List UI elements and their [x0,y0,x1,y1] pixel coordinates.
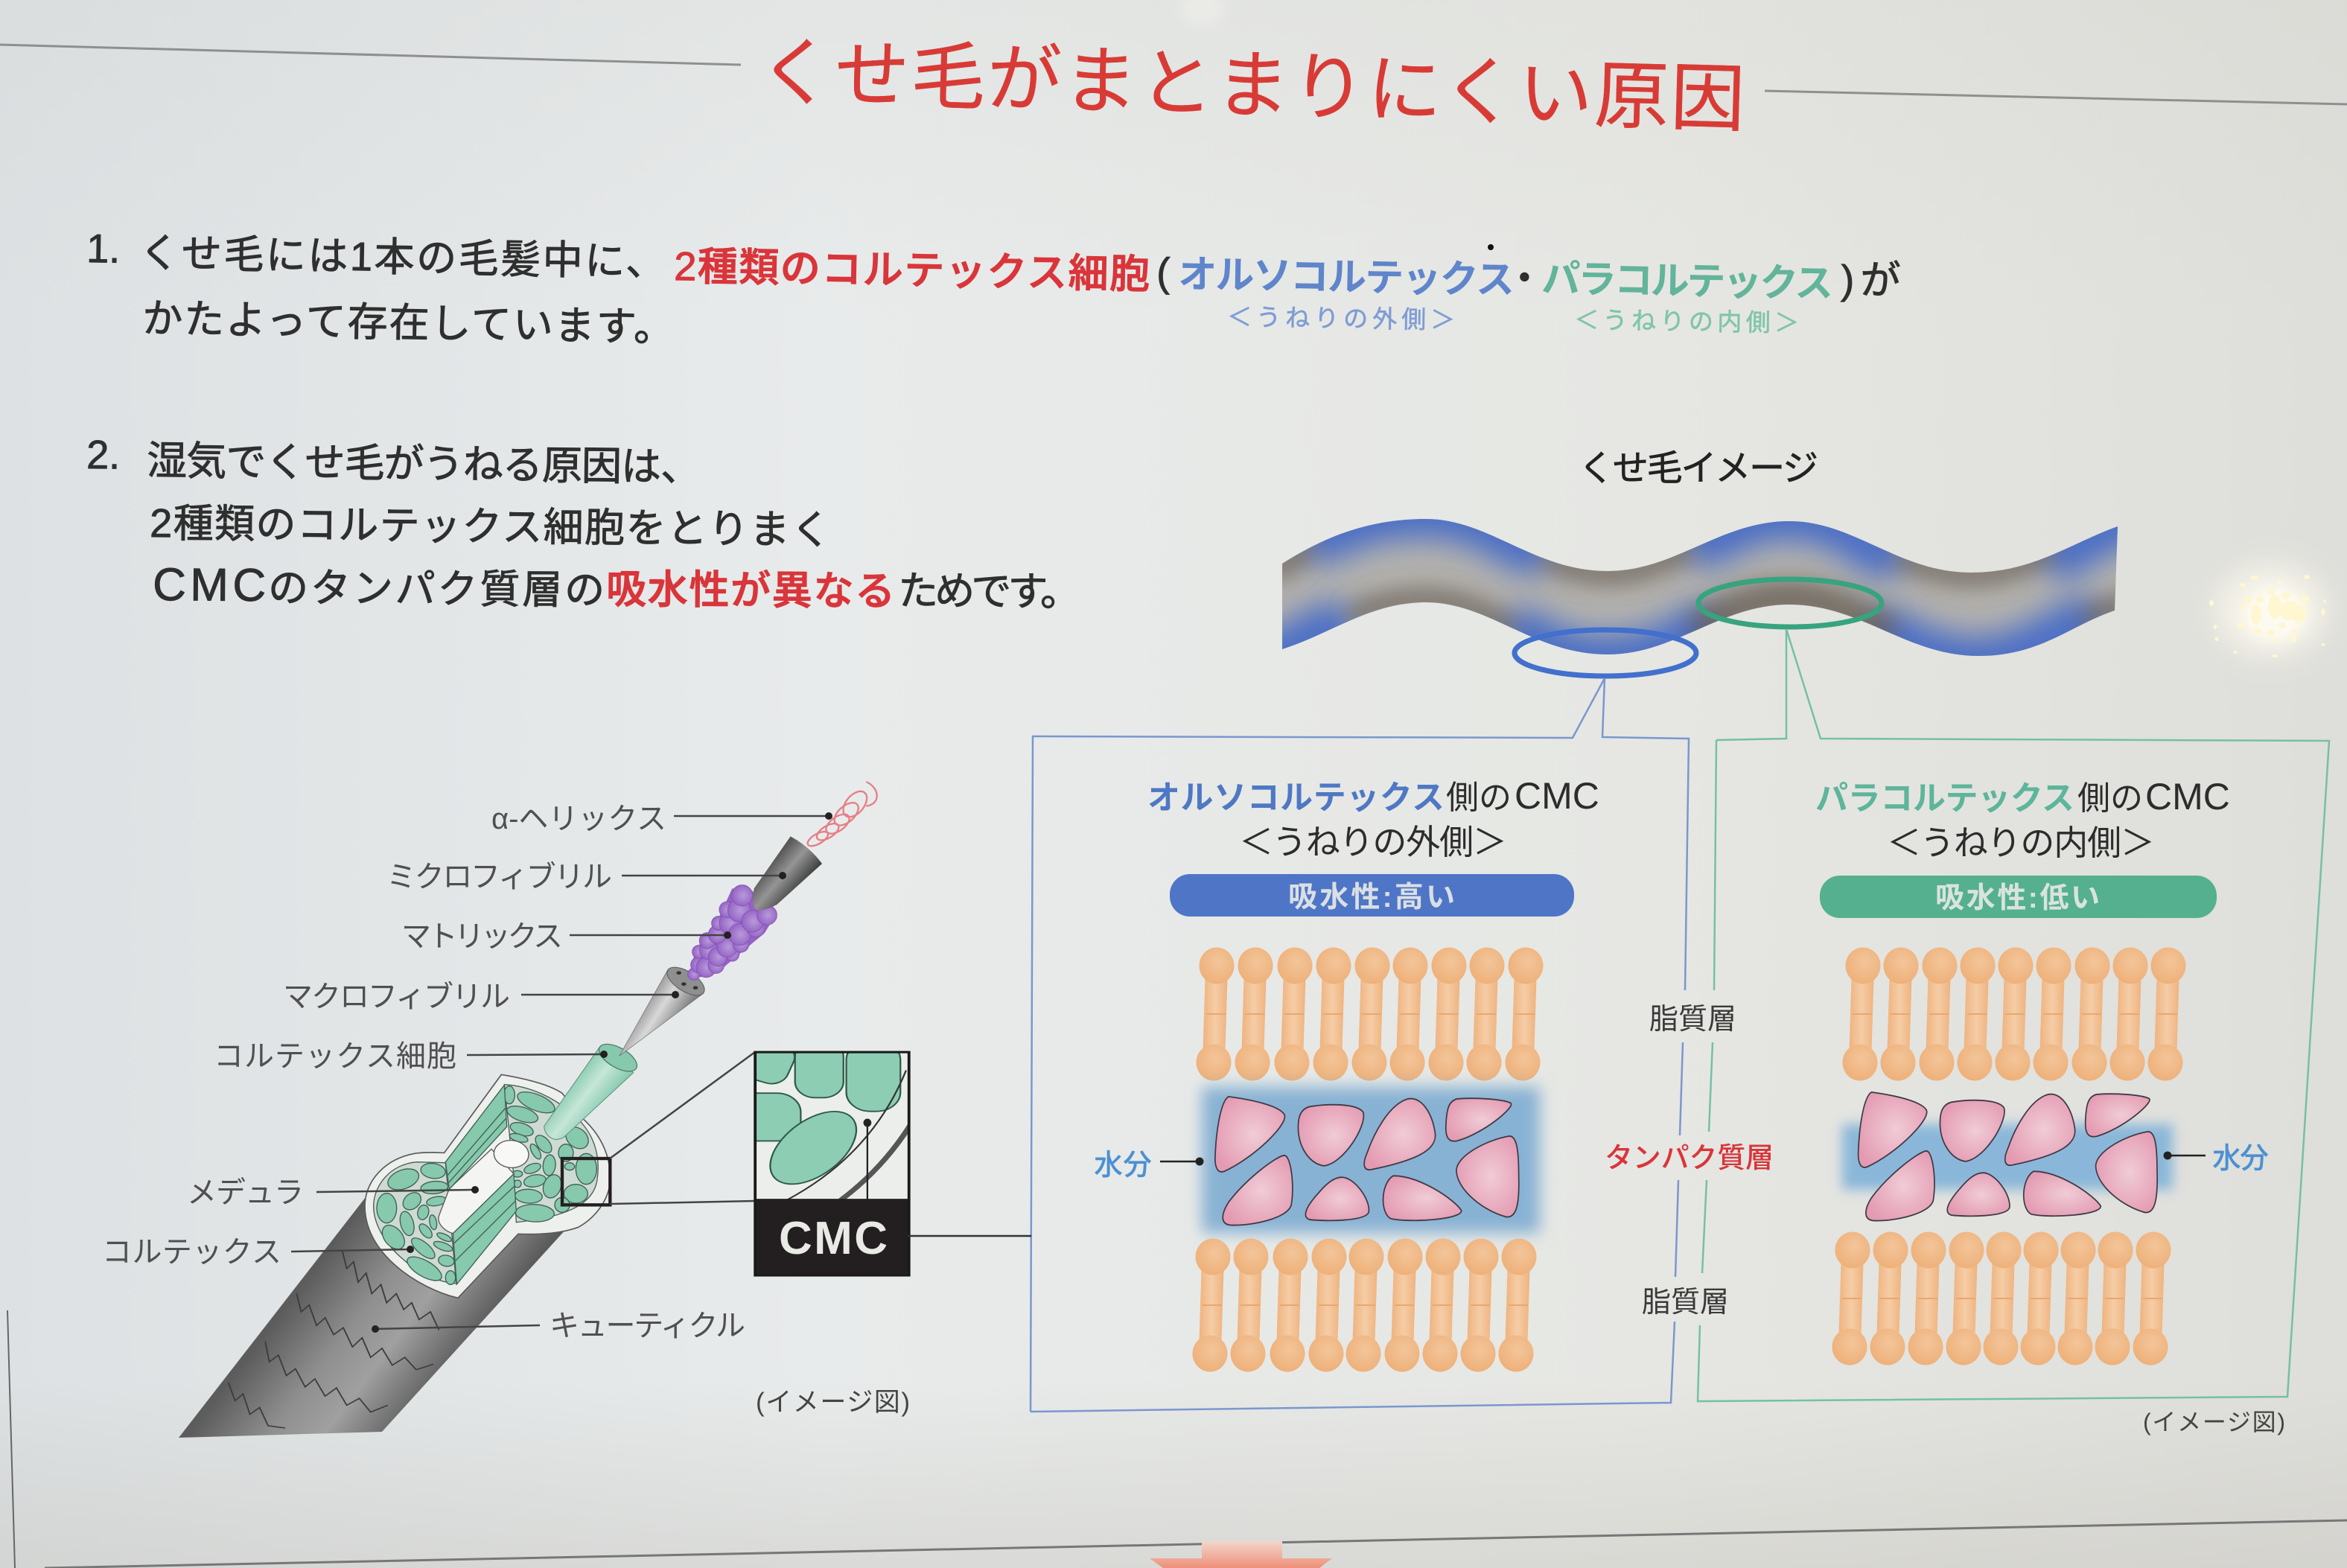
cross section [365,1039,641,1298]
labels: hair structure: ミクロフィブリル [386,861,612,893]
glare right [2209,564,2327,657]
subheading: outer side of wave: ＜うねりの外側＞ [1239,823,1507,861]
heading: ortho cortex [1147,775,1599,817]
labels: hair structure: マトリックス [401,920,563,953]
labels: hair structure: メデュラ [187,1176,304,1209]
heading: para cortex [1815,776,2230,818]
macrofibril cone [620,962,709,1056]
label: water: 水分 [1094,1150,1152,1182]
text block: point 2: のタンパク質層の [268,566,605,613]
heading: para cortex: CMC [2145,776,2230,818]
left edge line [7,1310,15,1568]
heading: para cortex: パラコルテックス [1815,780,2074,817]
medulla [439,1139,530,1234]
labels: hair structure: コルテックス細胞 [214,1040,456,1073]
subheading: inner side of wave: ＜うねりの内側＞ [1887,823,2155,862]
badge: high water absorption: 吸水性:高い [1288,882,1455,914]
glare top [1180,0,1225,27]
title rule left [0,45,741,65]
label: water [2164,1143,2269,1175]
text block: point 1: ( [1156,250,1171,295]
bottom arrow [1150,1541,1332,1568]
lipid layer upper [1842,947,2186,1081]
text block: point 1: オルソコルテックス [1178,253,1515,302]
labels: hair structure: α-ヘリックス [491,803,666,835]
selection box [562,1159,610,1205]
text block: point 2 [86,433,1080,615]
label: CMC: CMC [779,1213,888,1264]
text block: point 1: )が [1841,258,1901,303]
cortex cell cylinder [544,1039,641,1140]
white cut ring [365,1074,611,1298]
labels: hair structure: コルテックス [102,1236,281,1269]
caption: image diagram right: (イメージ図) [2143,1409,2285,1435]
cortex cells [377,1086,596,1285]
badge: low water absorption: 吸水性:低い [1935,882,2100,914]
inset: CMC magnified [754,1051,911,1276]
text block: point 2: ためです。 [898,569,1080,615]
text block: point 1: かたよって存在しています。 [142,296,675,350]
heading: ortho cortex: オルソコルテックス [1147,780,1445,816]
text block: point 1: ＜うねりの内側＞ [1574,306,1799,337]
text block: point 1: ・ [1504,256,1545,302]
text block: point 1: 2種類のコルテックス細胞 [674,244,1150,297]
badge: low water absorption [1820,876,2217,918]
hair shaft [179,1184,573,1438]
ring: outer side of wave [1515,630,1696,676]
label: water [1094,1150,1203,1182]
label: water: 水分 [2212,1143,2269,1175]
protein blobs [1859,1092,2157,1221]
badge: high water absorption [1170,874,1574,917]
heading: ortho cortex: CMC [1515,775,1599,817]
labels: hair structure [102,803,745,1342]
lipid layer lower [1832,1231,2171,1365]
label: lipid layer lower: 脂質層 [1642,1287,1729,1319]
heading: para cortex: 側の [2077,780,2143,817]
connector: CMC to panel [908,1235,1031,1237]
title rule right [1765,91,2347,104]
label: lipid layer upper: 脂質層 [1649,1004,1736,1036]
caption: image diagram left: (イメージ図) [756,1388,910,1417]
lipid layer lower [1193,1239,1537,1371]
text block: point 2: 2. [86,433,121,478]
wavy hair illustration [1282,519,2118,656]
text block: point 1 [86,226,1901,350]
panel: ortho cortex side CMC [1031,678,1689,1412]
cortex walls [445,1085,516,1284]
leader dots [372,812,832,1333]
ring: inner side of wave [1698,579,1882,627]
heading: ortho cortex: 側の [1446,780,1512,816]
labels: hair structure: マクロフィブリル [283,981,510,1013]
water layer [1202,1087,1540,1233]
diagram: hair structure [179,782,877,1438]
text block: point 2: 2種類のコルテックス細胞をとりまく [150,501,831,553]
water layer [1842,1124,2173,1190]
text block: point 1: 1. [86,226,121,272]
text block: point 2: 吸水性が異なる [606,567,895,614]
lipid layer upper [1196,947,1543,1081]
title: くせ毛がまとまりにくい原因 [757,31,1746,141]
text block: point 1: ＜うねりの外側＞ [1227,303,1455,334]
heading: wavy hair image: くせ毛イメージ [1579,449,1818,488]
labels: hair structure: キューティクル [550,1310,745,1342]
panel: para cortex side CMC [1698,629,2329,1401]
dust speck [1488,244,1494,250]
matrix cluster [688,885,777,980]
cuticle scale lines [229,1250,439,1428]
text block: point 1: くせ毛には1本の毛髪中に、 [139,231,666,284]
microfibril cone [753,836,822,911]
text block: point 1: パラコルテックス [1541,258,1834,306]
upper fibre stack [620,782,877,1056]
text block: point 2: CMC [153,559,266,611]
leader lines [291,816,829,1329]
label: protein layer: タンパク質層 [1605,1143,1774,1174]
text block: point 2: 湿気でくせ毛がうねる原因は、 [147,439,701,490]
bottom rule [45,1520,2347,1568]
protein blobs [1215,1097,1519,1226]
alpha helix [806,782,877,849]
